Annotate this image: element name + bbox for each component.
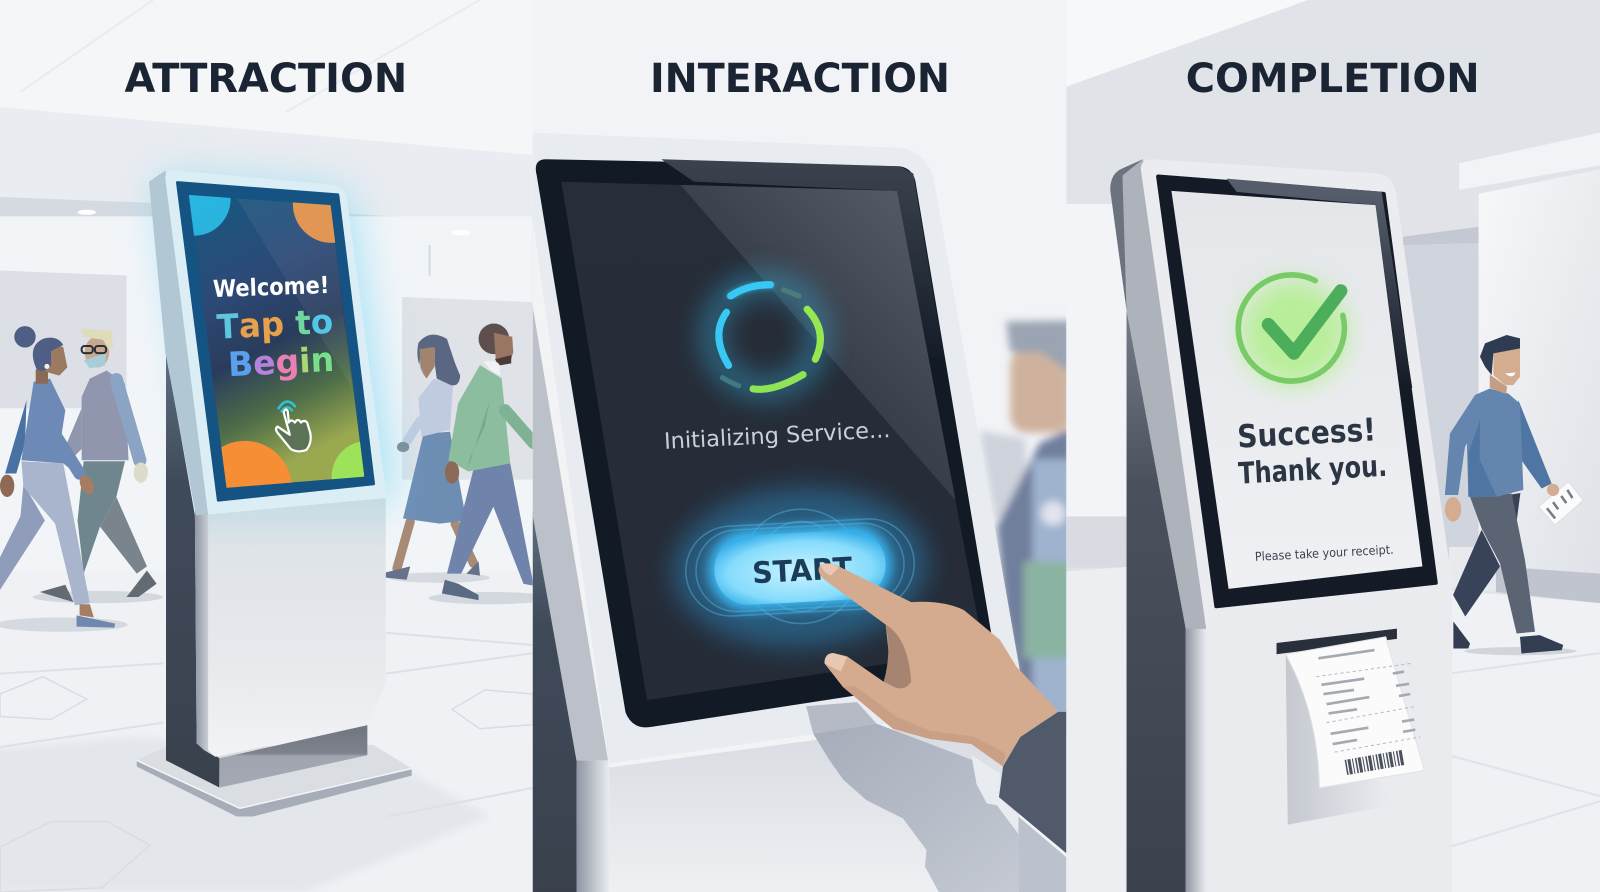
receipt paper	[1286, 637, 1424, 788]
kiosk frame	[533, 133, 1022, 767]
panel: interaction	[533, 0, 1073, 892]
background: hall	[1066, 0, 1600, 892]
hand shadow	[813, 724, 1018, 892]
kiosk glow	[158, 179, 393, 515]
person: woman with skirt	[386, 335, 490, 583]
receipt barcode	[1346, 757, 1404, 767]
person: man in green sweater	[428, 324, 533, 604]
background: wall	[532, 433, 533, 586]
kiosk frame	[1110, 159, 1452, 629]
panel: completion	[1066, 0, 1600, 892]
kiosk: close-up	[533, 133, 1066, 892]
hand pressing button	[819, 563, 1058, 766]
receipt printer	[1277, 629, 1424, 825]
bezel glint	[661, 159, 940, 336]
receipt lines	[1318, 650, 1415, 744]
screen text: please take receipt: Please take your receipt.	[1255, 543, 1394, 564]
person: man with mask	[33, 329, 163, 603]
kiosk bezel	[536, 159, 998, 727]
background: concourse	[0, 0, 533, 892]
screen text: begin: Begin	[227, 340, 335, 384]
kiosk pedestal	[1127, 310, 1452, 892]
screen text: thank you: Thank you.	[1237, 449, 1388, 491]
kiosk: receipt printing	[1110, 159, 1452, 892]
kiosk pedestal	[533, 510, 1066, 892]
kiosk screen	[561, 182, 984, 700]
kiosk base plate	[137, 745, 412, 816]
icon: tapping hand	[276, 402, 311, 451]
panel: attraction	[0, 0, 551, 892]
receipt curl	[1286, 654, 1389, 825]
screen text: welcome: Welcome!	[213, 271, 330, 303]
kiosk screen	[188, 195, 364, 488]
title: interaction: INTERACTION	[650, 56, 950, 102]
kiosk pedestal	[166, 352, 386, 787]
status text: Initializing Service...	[663, 417, 891, 455]
kiosk bezel	[1158, 177, 1436, 606]
kiosk screen	[1171, 191, 1422, 589]
screen text: success: Success!	[1236, 412, 1377, 456]
start button with ripples: START	[751, 551, 854, 590]
receipt slot	[1277, 629, 1397, 654]
start button with ripples	[668, 481, 932, 654]
screen text: tap to: Tap to	[216, 302, 334, 347]
background: blurred passer-by	[980, 320, 1073, 735]
spinner: loading ring	[712, 283, 820, 389]
title: attraction: ATTRACTION	[124, 56, 407, 102]
person: woman in blue top	[0, 326, 128, 632]
under-frame shade	[806, 702, 877, 734]
receipt in hand	[1538, 482, 1583, 525]
title: completion: COMPLETION	[1186, 56, 1480, 102]
sleeve	[999, 712, 1066, 853]
icon: success check	[1238, 275, 1347, 386]
kiosk frame	[149, 170, 386, 515]
bezel glint	[1227, 179, 1412, 388]
person: man leaving with receipt	[1445, 335, 1583, 655]
kiosk: glowing attract mode	[137, 162, 412, 816]
pedestal highlight	[971, 755, 1018, 834]
